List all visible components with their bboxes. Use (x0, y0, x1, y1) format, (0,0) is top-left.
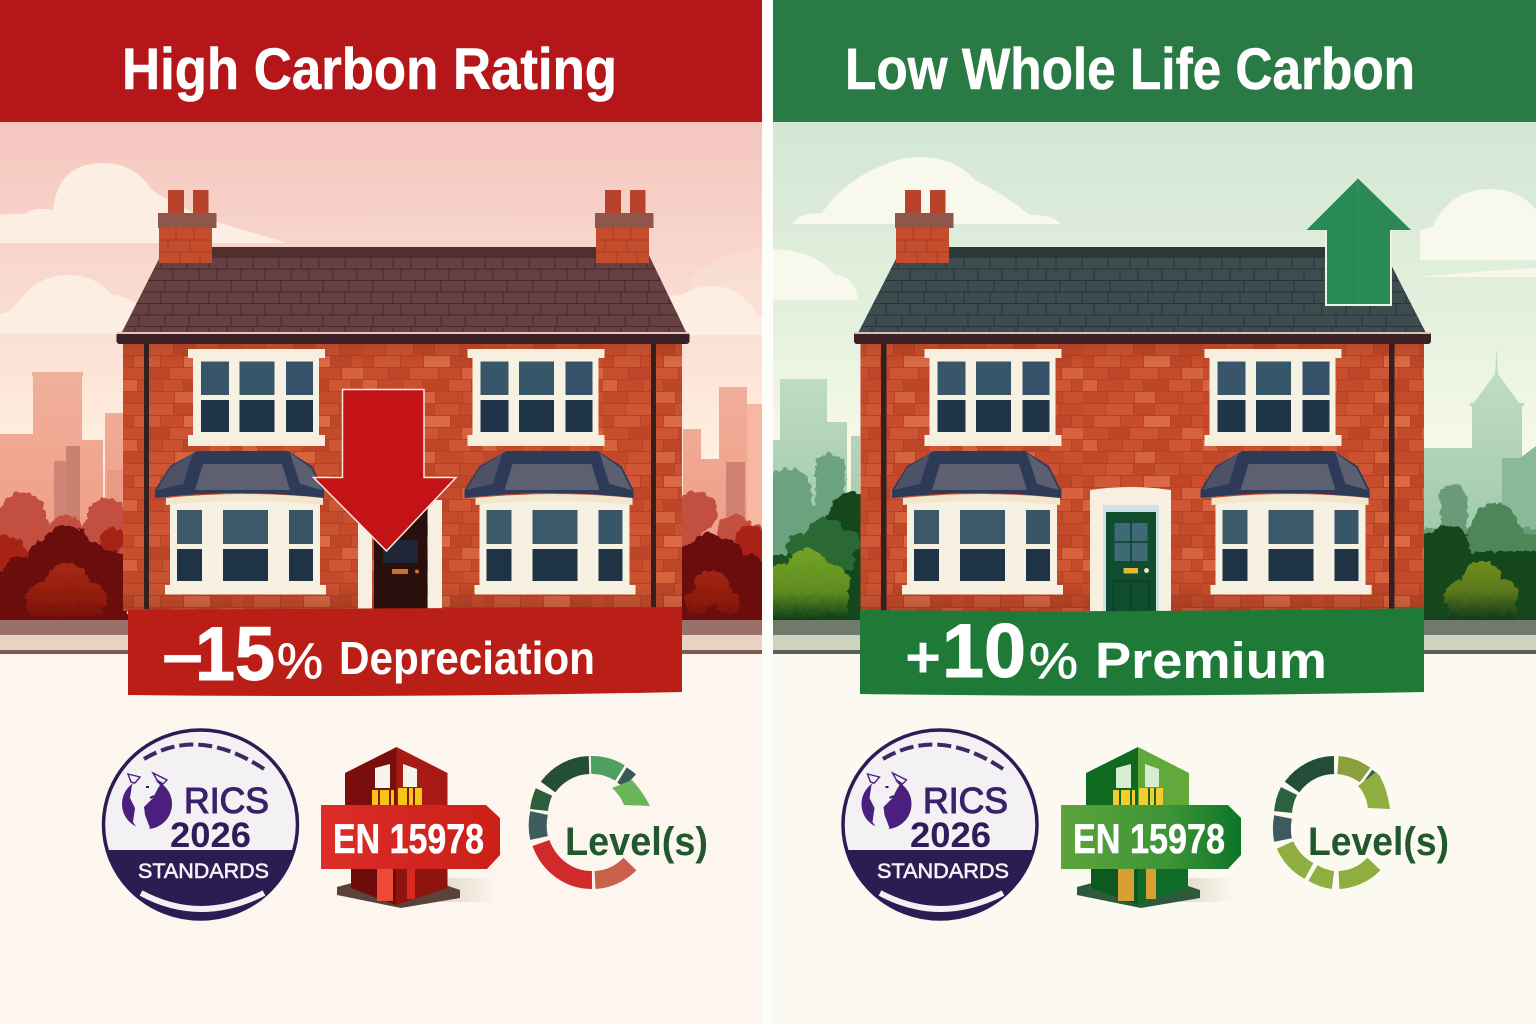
roof (121, 247, 687, 334)
background: trees (0, 491, 768, 628)
house (116, 190, 690, 612)
background: city skyline (773, 347, 1536, 569)
ribbon: -15% depreciation: 15 (195, 612, 275, 697)
wall (860, 343, 1424, 611)
value: – (162, 612, 203, 695)
gauge: levels (1282, 765, 1449, 880)
background: pavement (773, 620, 1536, 1024)
sign (321, 805, 500, 869)
background: sky (773, 122, 1536, 620)
eaves (116, 332, 690, 344)
upper window left (924, 349, 1062, 446)
badge: RICS 2026 standards: 2026 (910, 816, 991, 855)
badge: EN 15978 (321, 747, 500, 908)
ribbon: +10% premium (860, 608, 1424, 696)
eaves (854, 332, 1431, 344)
panel: low whole life carbon (756, 0, 1536, 1024)
upper window right (468, 349, 604, 446)
heading bar (773, 0, 1536, 122)
badge: RICS 2026 standards: STANDARDS (138, 860, 269, 883)
arrow: down (314, 390, 456, 551)
house (854, 190, 1431, 612)
wall (123, 343, 682, 611)
downpipe left (144, 343, 149, 609)
badge: EN 15978 (1061, 747, 1241, 908)
ribbon: +10% premium: 10 (942, 609, 1026, 694)
background: trees (756, 454, 1536, 630)
front door (358, 500, 442, 612)
label: Depreciation (339, 632, 595, 684)
roof (858, 247, 1426, 333)
background: sky (0, 122, 762, 620)
background: clouds (773, 157, 1536, 300)
background: pavement (0, 620, 762, 1024)
downpipe right (1389, 343, 1394, 611)
gauge: levels (538, 765, 708, 880)
label: Premium (1095, 632, 1327, 689)
bay window right (1200, 451, 1372, 594)
sign (1061, 805, 1241, 869)
ribbon: -15% depreciation: % (277, 633, 323, 689)
title: Low Whole Life Carbon (845, 37, 1415, 102)
icon: lion crest (122, 773, 172, 834)
badge: RICS 2026 standards: STANDARDS (877, 860, 1009, 883)
background: clouds (0, 163, 762, 335)
gauge text: Level(s) (1308, 820, 1449, 864)
sign text: EN 15978 (1073, 815, 1225, 862)
badge: RICS 2026 standards: RICS (184, 780, 269, 821)
icon: lion crest (862, 773, 912, 834)
downpipe left (881, 343, 886, 611)
badge: RICS 2026 standards (104, 730, 298, 919)
ribbon: +10% premium: % (1029, 633, 1078, 689)
chimney (895, 190, 954, 263)
sign text: EN 15978 (333, 815, 484, 862)
value: + (905, 625, 941, 690)
heading bar (0, 0, 762, 122)
downpipe right (651, 343, 656, 609)
bay window right (464, 451, 636, 594)
upper window left (188, 349, 325, 446)
front door (1090, 487, 1171, 612)
title: High Carbon Rating (122, 37, 617, 102)
ribbon: -15% depreciation (128, 607, 682, 697)
gauge text: Level(s) (565, 820, 708, 864)
chimney right (595, 190, 654, 263)
badge: RICS 2026 standards: RICS (923, 780, 1008, 821)
badge: RICS 2026 standards: 2026 (170, 816, 251, 855)
panel: high carbon rating (0, 0, 768, 1024)
bay window left (155, 451, 326, 594)
chimney left (158, 190, 216, 263)
upper window right (1204, 349, 1342, 446)
bay window left (892, 451, 1063, 594)
badge: RICS 2026 standards (843, 730, 1037, 919)
arrow: up (1306, 178, 1411, 305)
background: city skyline (0, 372, 762, 574)
